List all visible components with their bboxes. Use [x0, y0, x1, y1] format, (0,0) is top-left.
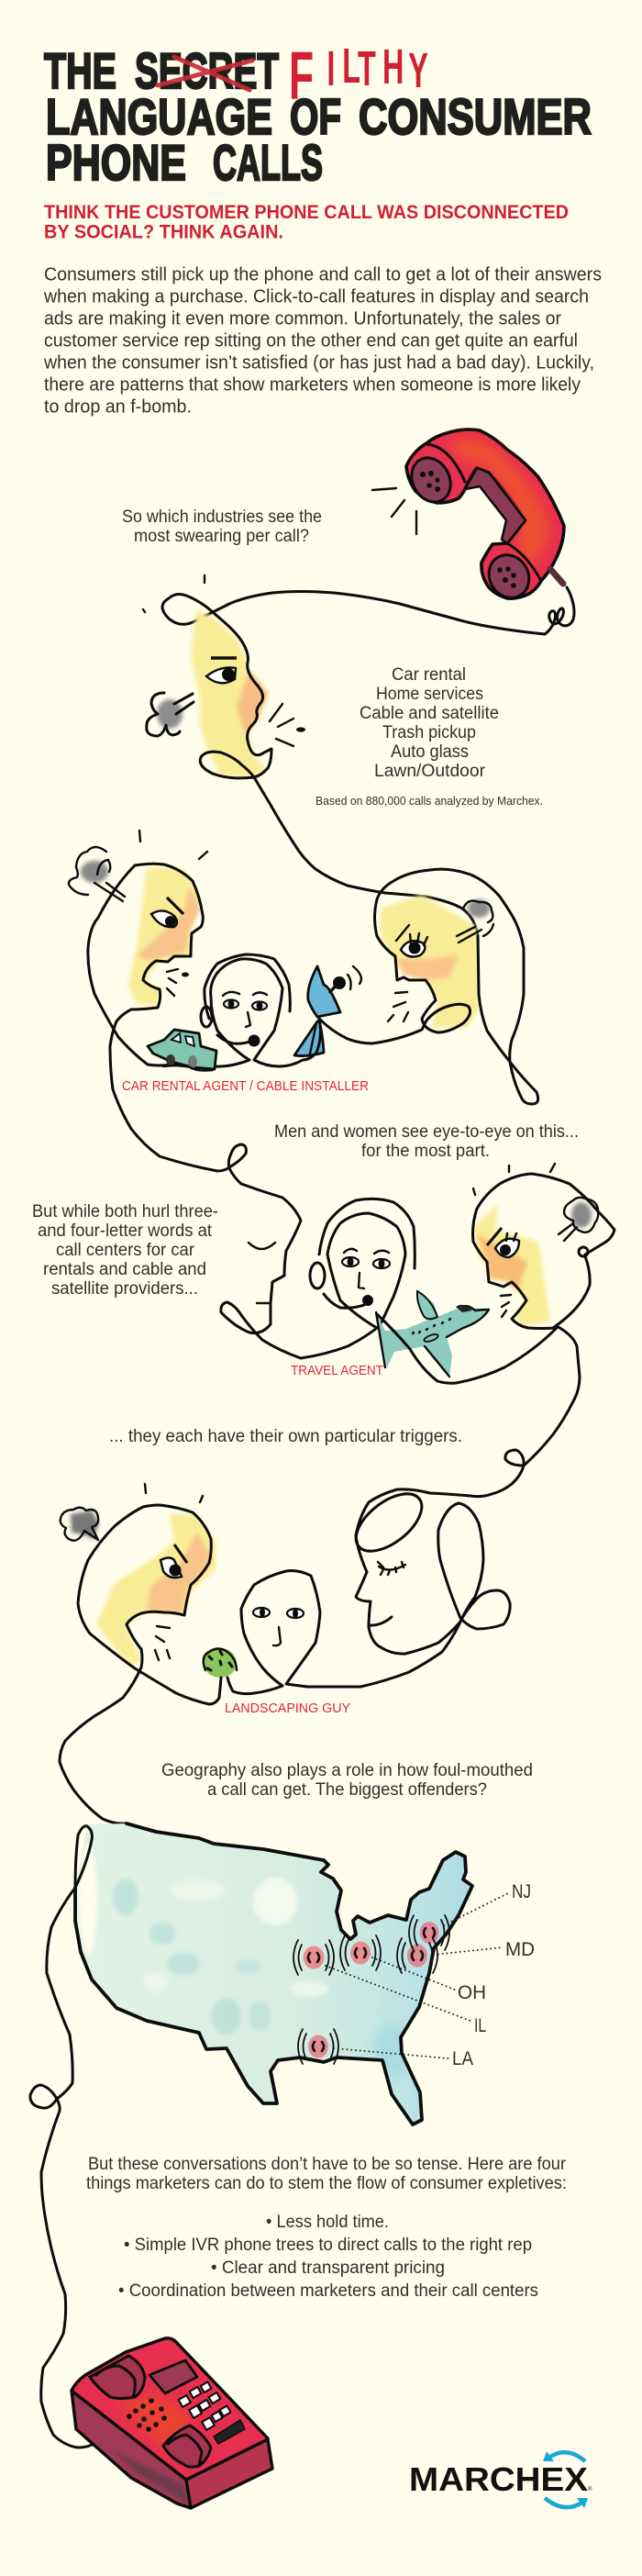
- label: car rental agent / cable installer: CAR RENTAL AGENT / CABLE INSTALLER: [122, 1078, 369, 1094]
- text: but while both: call centers for car: [56, 1241, 195, 1260]
- text: these conversations: [86, 2155, 567, 2193]
- state labels: OH: [458, 1982, 486, 2003]
- text: these conversations: things marketers can do to stem the flow of consumer expletives:: [86, 2174, 567, 2193]
- list: top swearing industries: Car rental: [392, 665, 466, 685]
- intro paragraph: to drop an f-bomb.: [44, 397, 192, 418]
- title: OF: [290, 88, 341, 145]
- hot spots: [293, 1915, 449, 2064]
- handwritten word: filthy: F: [289, 38, 314, 114]
- intro paragraph: Consumers still pick up the phone and call to get a lot of their answers: [44, 265, 602, 285]
- list: top swearing industries: Auto glass: [391, 742, 469, 762]
- icon: teal airplane: [376, 1291, 489, 1377]
- text: so which industries: most swearing per call?: [134, 527, 309, 546]
- state labels: MD: [505, 1939, 535, 1960]
- state labels: LA: [452, 2048, 473, 2069]
- intro paragraph: there are patterns that show marketers when someone is more likely: [44, 375, 581, 396]
- phone cord: [254, 777, 478, 936]
- intro paragraph: customer service rep sitting on the other end can get quite an earful: [44, 331, 578, 351]
- figure: angry man with cloud: [377, 1164, 614, 1383]
- subheading: [44, 202, 569, 242]
- label: travel agent: TRAVEL AGENT: [291, 1363, 383, 1378]
- handwritten word: filthy: [289, 38, 428, 114]
- text: men and women: for the most part.: [361, 1142, 490, 1161]
- title: SECRET: [135, 42, 279, 99]
- figure: car rental agent with headset: [201, 954, 320, 1066]
- text: geography: a call can get. The biggest offenders?: [207, 1780, 487, 1800]
- logo: marchex: [409, 2451, 592, 2508]
- list: top swearing industries: Home services: [376, 685, 483, 704]
- intro paragraph: when making a purchase. Click-to-call features in display and search: [43, 287, 589, 307]
- title: LANGUAGE: [46, 88, 272, 145]
- text: so which industries: [122, 507, 322, 546]
- label: landscaping guy: LANDSCAPING GUY: [225, 1701, 350, 1716]
- intro paragraph: when the consumer isn’t satisfied (or has just had a bad day). Luckily,: [43, 353, 594, 374]
- icon: red desk telephone: [72, 2338, 272, 2508]
- text: men and women: [274, 1122, 579, 1161]
- title: PHONE: [46, 134, 186, 191]
- source note: Based on 880,000 calls analyzed by Marchex.: [315, 794, 543, 808]
- text: but while both: rentals and cable and: [43, 1260, 206, 1279]
- text: but while both: and four-letter words at: [38, 1221, 213, 1241]
- bullet list: four things marketers can do: • Clear and transparent pricing: [211, 2258, 445, 2278]
- phone cord: [30, 1826, 107, 2448]
- phone cord: [356, 1377, 580, 1535]
- figure: second angry caller in profile: [69, 831, 217, 1171]
- handwritten correction: secret crossed out: [158, 57, 252, 90]
- text: men and women: Men and women see eye-to-eye on this...: [274, 1122, 579, 1142]
- text: so which industries: So which industries see the: [122, 507, 322, 527]
- intro paragraph: [43, 265, 602, 418]
- text: but while both: But while both hurl three-: [32, 1202, 218, 1221]
- subheading: BY SOCIAL? THINK AGAIN.: [44, 222, 283, 242]
- list: top swearing industries: [360, 665, 499, 781]
- logo: marchex: ®: [588, 2486, 592, 2492]
- text: these conversations: But these conversations don’t have to be so tense. Here are four: [88, 2155, 567, 2174]
- title: [44, 42, 592, 191]
- state labels: [452, 1881, 535, 2069]
- figure: calm profile with closed eye: [217, 1144, 377, 1358]
- title: THE: [44, 42, 116, 99]
- icon: satellite dish: [294, 966, 361, 1056]
- list: top swearing industries: Lawn/Outdoor: [374, 762, 486, 781]
- text: they each have: ... they each have their own particular triggers.: [109, 1427, 462, 1446]
- figure: swearing caller in profile: [143, 575, 305, 778]
- figure: angry landscaper customer: [60, 1484, 221, 1823]
- icon: green car: [148, 1030, 216, 1071]
- list: top swearing industries: Trash pickup: [382, 723, 476, 742]
- state labels: NJ: [512, 1881, 531, 1902]
- icon: green shrub: [204, 1648, 237, 1678]
- us map: [73, 1822, 535, 2129]
- subheading: THINK THE CUSTOMER PHONE CALL WAS DISCONNECTED: [44, 202, 569, 223]
- list: top swearing industries: Cable and satellite: [360, 704, 499, 723]
- text: geography: Geography also plays a role in how foul-mouthed: [161, 1761, 533, 1780]
- state labels: IL: [474, 2015, 486, 2036]
- intro paragraph: ads are making it even more common. Unfortunately, the sales or: [44, 309, 561, 329]
- title: CALLS: [213, 134, 323, 191]
- text: but while both: satellite providers...: [51, 1279, 198, 1299]
- icon: red telephone handset: [372, 429, 574, 634]
- phone cord: [162, 591, 545, 634]
- bullet list: four things marketers can do: • Less hold time.: [266, 2213, 389, 2232]
- figure: travel agent with headset: [310, 1199, 415, 1328]
- bullet list: four things marketers can do: [118, 2213, 538, 2301]
- text: but while both: [32, 1202, 218, 1299]
- bullet list: four things marketers can do: • Coordination between marketers and their call centers: [118, 2281, 538, 2301]
- leader lines: [326, 1892, 510, 2058]
- figure: landscaping guy face: [227, 1571, 360, 1694]
- text: geography: [161, 1761, 533, 1800]
- handwritten word: filthy: ILTHY: [327, 39, 428, 98]
- figure: woman with bun and closed eye: [346, 1483, 510, 1687]
- figure: angry woman caller: [319, 869, 538, 1104]
- bullet list: four things marketers can do: • Simple IVR phone trees to direct calls to the right rep: [124, 2236, 532, 2255]
- logo: marchex: MARCHEX: [409, 2460, 588, 2498]
